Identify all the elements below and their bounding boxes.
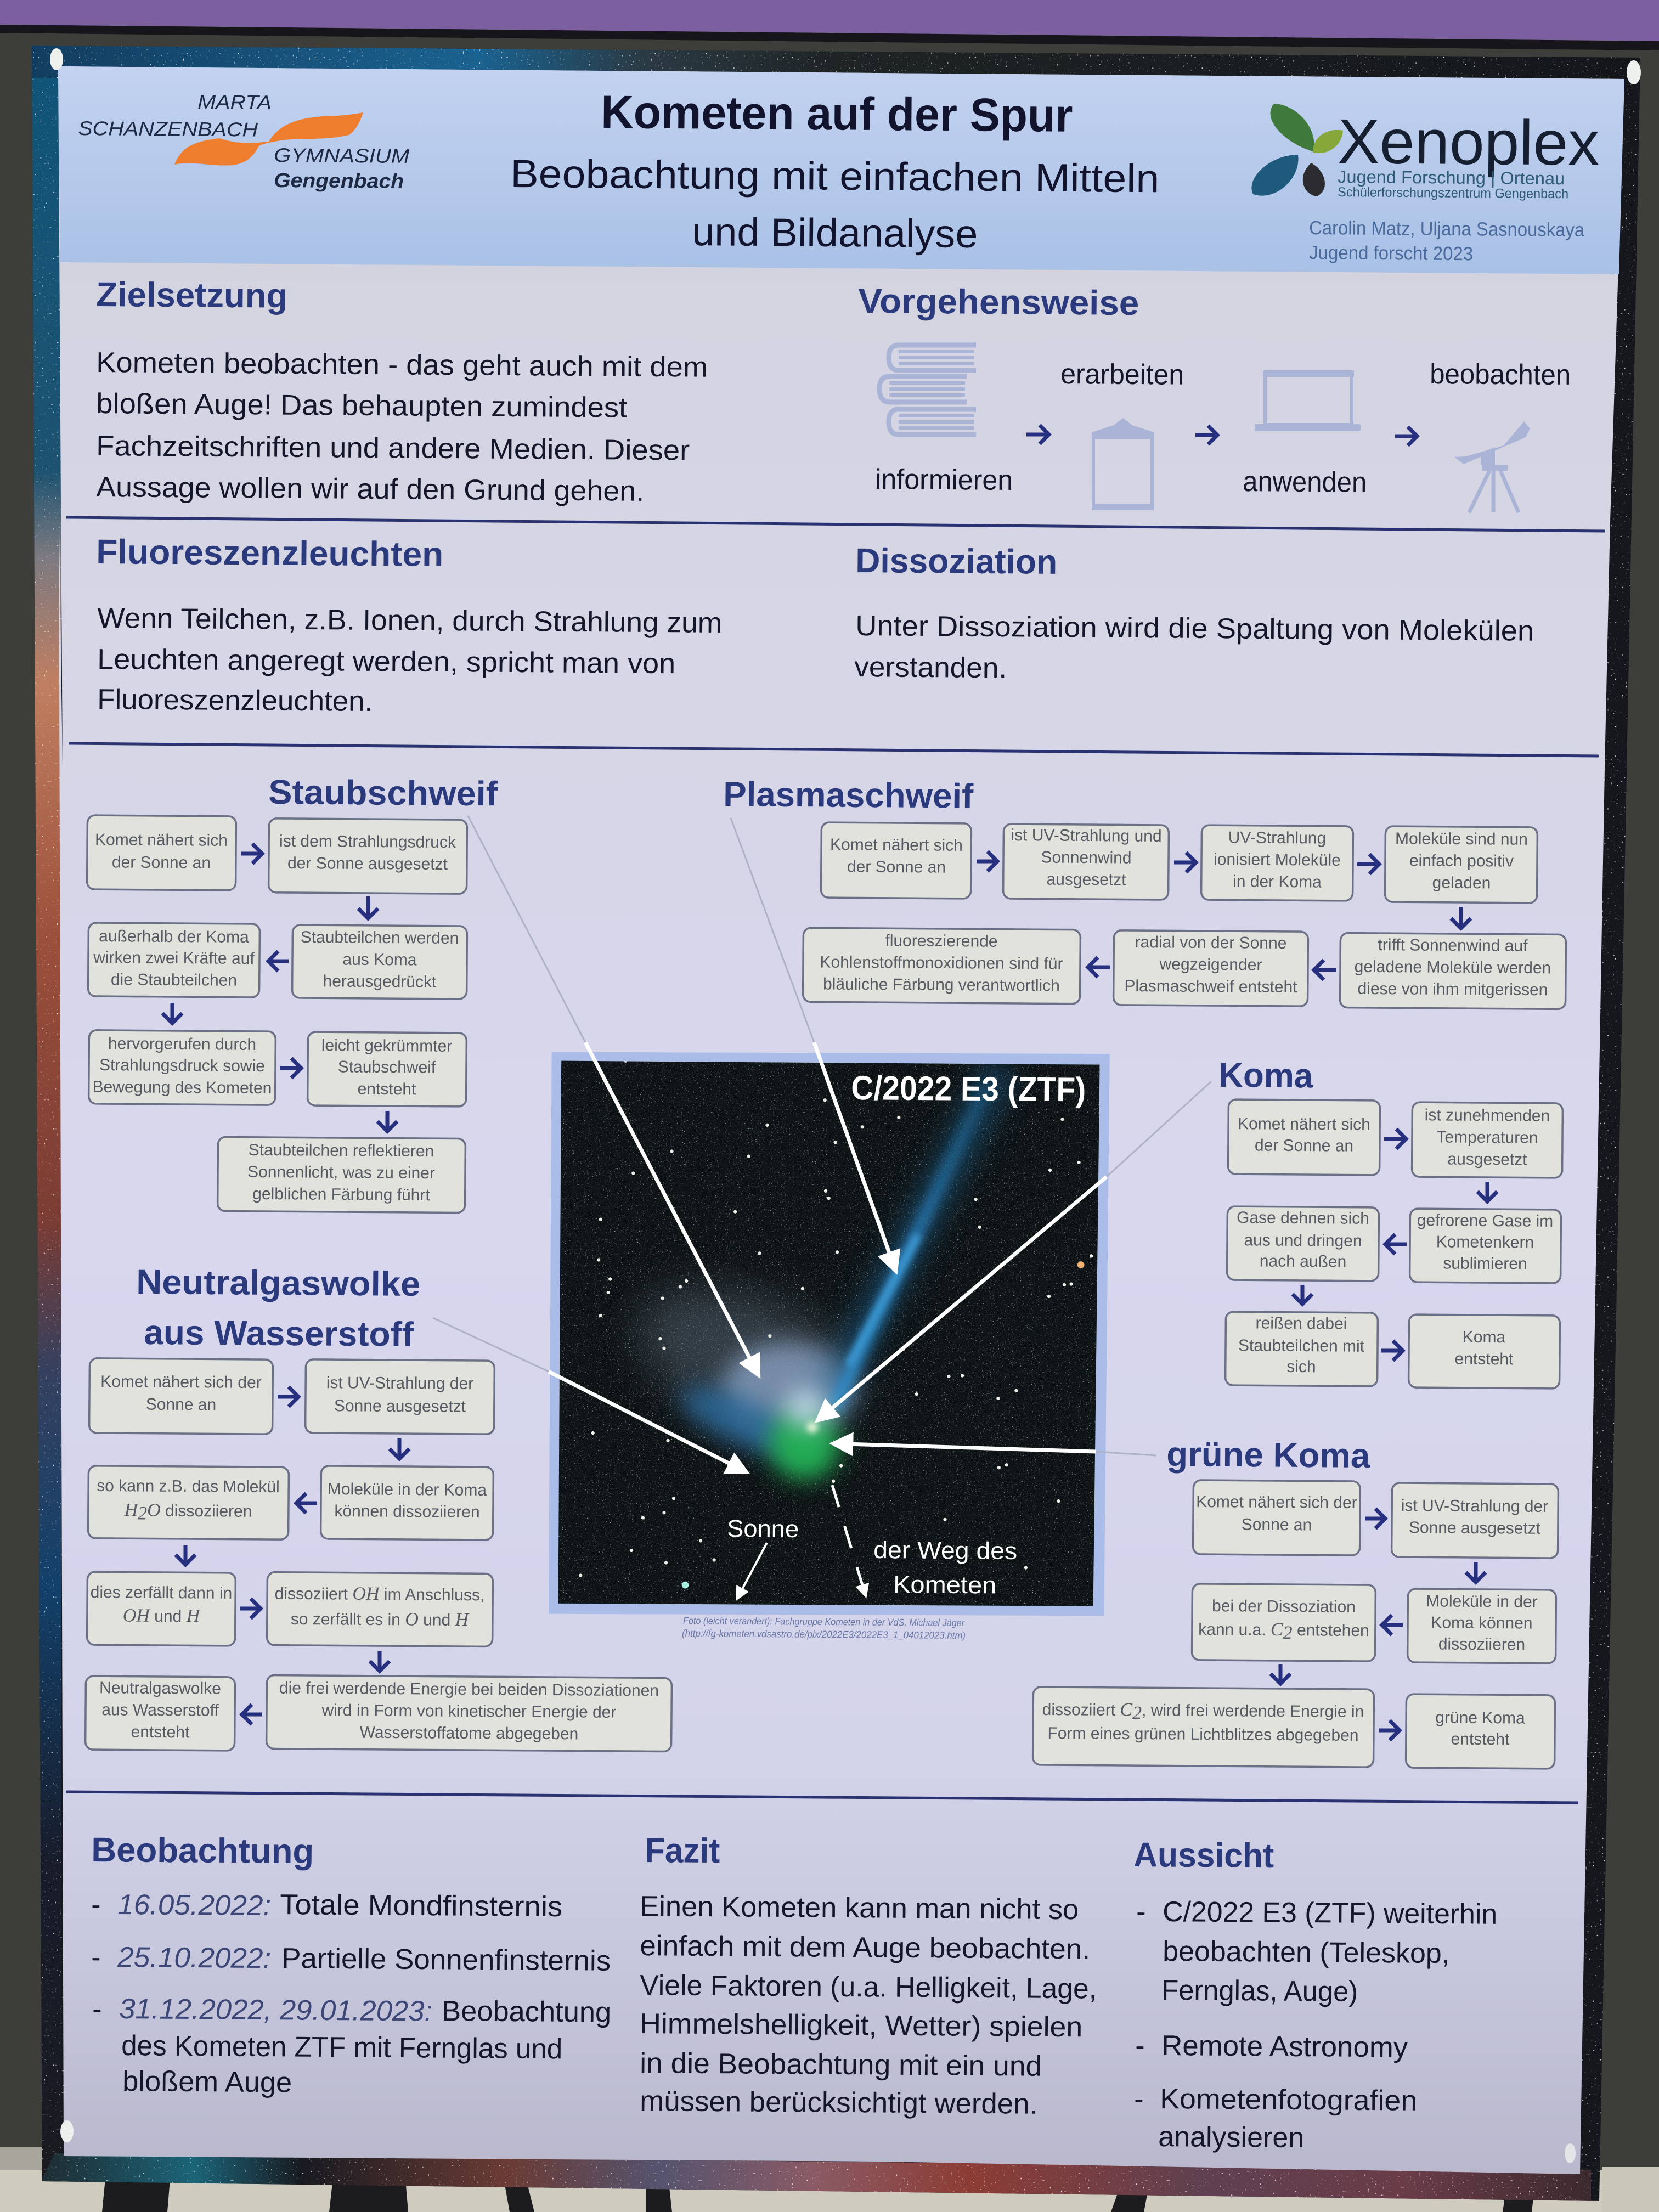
icon: telescope xyxy=(1454,421,1530,512)
icon: four leaves xyxy=(1251,104,1343,196)
list item: 25.10.2022: - xyxy=(91,1942,101,1973)
text block: Zielsetzung: Fachzeitschriften und andere Medien. Dieser xyxy=(96,430,690,466)
box 7: bläuliche Färbung verantwortlich xyxy=(823,975,1060,995)
panel: grüne Koma flow xyxy=(1033,1435,1558,1769)
arrow xyxy=(268,951,289,971)
panel: Dissoziation xyxy=(854,541,1534,684)
box 2: ist UV-Strahlung und xyxy=(1011,826,1162,845)
list item: Remote Astronomy: Remote Astronomy xyxy=(1161,2030,1408,2064)
list item: 31.12.2022, 29.01.2023 xyxy=(92,1993,611,2098)
label: Sonne: Sonne xyxy=(727,1515,799,1543)
box 4 xyxy=(88,1466,289,1539)
text block: Fluoreszenzleuchten xyxy=(97,602,722,718)
label: erarbeiten: erarbeiten xyxy=(1060,358,1184,391)
arrow xyxy=(1357,854,1379,874)
box 3 xyxy=(1408,1589,1556,1663)
list item: Remote Astronomy: - xyxy=(1135,2030,1145,2062)
text block: Fluoreszenzleuchten: Leuchten angeregt werden, spricht man von xyxy=(97,644,675,680)
box 1 xyxy=(821,822,971,899)
box 6 xyxy=(1114,930,1308,1006)
arrow xyxy=(370,1651,390,1671)
list item: weiter beobachten: Fernglas, Auge) xyxy=(1161,1974,1358,2008)
list item: 16.05.2022: - xyxy=(91,1889,101,1921)
school logo: MARTA xyxy=(198,91,272,114)
box 2: Sonne ausgesetzt xyxy=(334,1397,466,1416)
box 1 xyxy=(87,815,236,890)
comet photo with frame xyxy=(549,1052,1110,1616)
box 6 xyxy=(308,1032,466,1107)
photo caption: Foto (leicht verändert): Fachgruppe Kometen in der VdS, Michael Jäger xyxy=(683,1615,965,1628)
heading: Neutralgaswolke aus Wasserstoff xyxy=(136,1263,421,1354)
box 4: 2 xyxy=(1283,1623,1293,1643)
arrow: Neutralgaswolke to photo xyxy=(433,1318,735,1466)
box 7 xyxy=(267,1675,672,1752)
box 3: Moleküle in der Koma xyxy=(328,1480,487,1499)
arrow xyxy=(377,1111,397,1131)
box 4: bei der Dissoziation xyxy=(1212,1597,1356,1616)
box 3 xyxy=(292,925,467,999)
panel: Fluoreszenzleuchten xyxy=(96,533,722,718)
list item: 16.05.2022: Totale Mondfinsternis xyxy=(280,1889,562,1923)
text block: Fazit: einfach mit dem Auge beobachten. xyxy=(640,1930,1090,1965)
box 5: reißen dabei xyxy=(1255,1314,1347,1333)
list item: Kometenfotografien: analysieren xyxy=(1158,2121,1304,2154)
label: beobachten: beobachten xyxy=(1430,358,1571,391)
box 2: ist UV-Strahlung der xyxy=(1401,1497,1548,1516)
arrow: Koma to photo xyxy=(827,1081,1211,1412)
text block: Fazit: müssen berücksichtigt werden. xyxy=(640,2085,1037,2120)
list item: weiter beobachten: - xyxy=(1136,1896,1146,1928)
panel: Staubschweif flow xyxy=(87,773,499,1213)
arrow xyxy=(241,844,262,864)
box 2: ausgesetzt xyxy=(1046,870,1126,889)
box 4: 2 xyxy=(138,1503,147,1523)
box 2 xyxy=(1003,824,1169,900)
box 6: grüne Koma xyxy=(1435,1708,1525,1728)
subtitle line 1: Beobachtung mit einfachen Mitteln xyxy=(510,152,1160,201)
box 6: entsteht xyxy=(358,1080,416,1098)
box 3: können dissoziieren xyxy=(334,1502,480,1521)
panel: Beobachtung xyxy=(91,1831,611,2098)
heading: Vorgehensweise: Vorgehensweise xyxy=(858,282,1139,323)
text block: Zielsetzung: Aussage wollen wir auf den Grund gehen. xyxy=(96,471,644,507)
icon: clipboard xyxy=(1092,418,1154,510)
box 5: dissoziiert C xyxy=(1042,1700,1132,1720)
box 8 xyxy=(86,1676,235,1751)
list item: weiter beobachten: beobachten (Teleskop, xyxy=(1163,1936,1449,1970)
box 4: Gase dehnen sich xyxy=(1237,1209,1369,1228)
photo caption xyxy=(682,1615,966,1641)
box 3: sublimieren xyxy=(1443,1254,1527,1273)
arrow xyxy=(1382,1615,1403,1635)
subtitle line 2: und Bildanalyse xyxy=(692,210,978,256)
text block: Fluoreszenzleuchten: Wenn Teilchen, z.B. Ionen, durch Strahlung zum xyxy=(97,602,722,639)
list item: 16.05.2022: 16.05.2022: xyxy=(117,1889,271,1922)
text block: Fazit xyxy=(640,1891,1097,2120)
box 3: herausgedrückt xyxy=(323,972,437,991)
box 7: gelblichen Färbung führt xyxy=(252,1185,431,1204)
box 3 xyxy=(1410,1209,1561,1283)
heading: Fazit: Fazit xyxy=(645,1831,720,1870)
box 2: der Sonne ausgesetzt xyxy=(287,854,448,873)
box 5 xyxy=(1226,1312,1378,1386)
box 6 xyxy=(1409,1314,1560,1389)
heading: Staubschweif: Staubschweif xyxy=(268,773,499,813)
box 5: sich xyxy=(1286,1358,1316,1376)
arrow xyxy=(1314,960,1336,980)
box 3: ionisiert Moleküle xyxy=(1214,850,1341,870)
box 4: geladen xyxy=(1432,874,1491,892)
box 4: Moleküle sind nun xyxy=(1395,830,1528,849)
text block: Fazit: Viele Faktoren (u.a. Helligkeit, Lage, xyxy=(640,1970,1097,2005)
box 5: geladene Moleküle werden xyxy=(1355,958,1551,977)
box 7: wird in Form von kinetischer Energie der xyxy=(321,1701,617,1722)
box 2 xyxy=(1412,1102,1562,1178)
panel: Aussicht xyxy=(1133,1836,1497,2154)
list item: 31.12.2022, 29.01.2023: - xyxy=(92,1993,102,2025)
text block: Dissoziation xyxy=(854,610,1534,684)
text block: Fazit: Himmelshelligkeit, Wetter) spielen xyxy=(640,2008,1082,2043)
box 7: die frei werdende Energie bei beiden Dissoziationen xyxy=(279,1679,659,1700)
box 6: entsteht xyxy=(1455,1350,1514,1368)
box 2: Temperaturen xyxy=(1436,1128,1538,1147)
box 4: außerhalb der Koma xyxy=(99,927,249,946)
box 4 xyxy=(88,923,259,997)
school logo: GYMNASIUM xyxy=(274,144,409,167)
arrow xyxy=(1365,1509,1385,1528)
box 3: Kometenkern xyxy=(1436,1233,1534,1252)
arrow xyxy=(176,1545,195,1565)
text block: Zielsetzung xyxy=(96,347,708,507)
arrow xyxy=(1381,1341,1403,1361)
text block: Zielsetzung: Kometen beobachten - das geht auch mit dem xyxy=(96,347,708,383)
heading: Zielsetzung: Zielsetzung xyxy=(96,275,288,315)
box 1 xyxy=(1228,1099,1380,1175)
box 6: Staubschweif xyxy=(338,1058,436,1077)
box 7 xyxy=(218,1137,465,1213)
list item: 25.10.2022 xyxy=(91,1942,611,1977)
box 3 xyxy=(1201,825,1353,901)
arrow: Staubschweif to photo xyxy=(468,816,753,1364)
box 7: Staubteilchen reflektieren xyxy=(249,1141,434,1160)
box 5: hervorgerufen durch xyxy=(108,1035,256,1054)
box 5 xyxy=(1340,933,1566,1009)
box 4: kann u.a. C xyxy=(1198,1620,1283,1640)
box 4: aus und dringen xyxy=(1244,1231,1362,1250)
box 3: Moleküle in der xyxy=(1426,1592,1538,1611)
arrow: grüne Koma to photo xyxy=(846,1444,1156,1455)
box 3 xyxy=(321,1466,493,1540)
arrow xyxy=(390,1438,409,1459)
arrow xyxy=(162,1003,182,1023)
panel: Neutralgaswolke flow xyxy=(86,1263,672,1752)
box 1: der Sonne an xyxy=(1255,1136,1353,1155)
box 2: ausgesetzt xyxy=(1447,1150,1527,1169)
box 8: entsteht xyxy=(131,1723,190,1741)
heading: Dissoziation: Dissoziation xyxy=(855,541,1058,582)
box 4: dissoziieren xyxy=(165,1502,252,1521)
panel: Plasmaschweif flow xyxy=(723,775,1566,1009)
box 4: O xyxy=(147,1500,161,1521)
Xenoplex logo: Xenoplex xyxy=(1338,106,1600,179)
box 3: in der Koma xyxy=(1233,872,1322,891)
box 5: , wird frei werdende Energie in xyxy=(1142,1701,1364,1721)
box 4: die Staubteilchen xyxy=(111,970,237,990)
box 7: Kohlenstoffmonoxidionen sind für xyxy=(820,953,1063,973)
box 6: so zerfällt es in O und H xyxy=(291,1609,470,1630)
box 5 xyxy=(89,1030,275,1105)
box 6: entsteht xyxy=(1451,1730,1510,1748)
label: C/2022 E3 (ZTF): C/2022 E3 (ZTF) xyxy=(851,1069,1086,1109)
list item: Kometenfotografien: Kometenfotografien xyxy=(1160,2083,1417,2117)
authors: Carolin Matz, Uljana Sasnouskaya xyxy=(1309,217,1585,241)
list item: Kometenfotografien: - xyxy=(1134,2083,1144,2115)
box 5: OH und H xyxy=(123,1606,201,1626)
authors xyxy=(1309,217,1585,264)
box 1 xyxy=(1193,1480,1360,1555)
panel: Zielsetzung xyxy=(96,275,708,507)
arrow xyxy=(1385,1234,1407,1254)
icon: orange swoosh xyxy=(174,112,363,166)
arrow xyxy=(1174,853,1196,872)
box 4 xyxy=(1385,826,1537,903)
box 8: aus Wasserstoff xyxy=(101,1701,219,1720)
Xenoplex logo xyxy=(1251,104,1600,201)
box 5: trifft Sonnenwind auf xyxy=(1378,936,1528,955)
box 6: wegzeigender xyxy=(1159,955,1262,974)
arrow xyxy=(1379,1720,1400,1740)
box 2 xyxy=(1392,1483,1558,1558)
text block: Fazit: Einen Kometen kann man nicht so xyxy=(640,1891,1079,1926)
box 1 xyxy=(89,1358,273,1434)
box 4: einfach positiv xyxy=(1409,851,1514,871)
arrow xyxy=(242,1705,262,1724)
box 6: Koma xyxy=(1463,1328,1506,1346)
box 1: Komet nähert sich xyxy=(830,836,963,855)
school logo: SCHANZENBACH xyxy=(78,117,258,141)
box 8: Neutralgaswolke xyxy=(99,1679,221,1698)
list item: 31.12.2022, 29.01.2023: 31.12.2022, 29.01.2023: xyxy=(119,1993,432,2027)
box 6: Plasmaschweif entsteht xyxy=(1124,977,1297,996)
icon: laptop xyxy=(1255,370,1361,431)
arrow xyxy=(1451,907,1471,928)
divider xyxy=(66,517,1605,531)
divider xyxy=(69,743,1599,756)
arrow xyxy=(1384,1129,1406,1149)
arrow: Plasmaschweif to photo xyxy=(731,818,891,1259)
box 1: Komet nähert sich xyxy=(95,831,228,850)
text block: Fluoreszenzleuchten: Fluoreszenzleuchten. xyxy=(97,684,373,718)
box 7 xyxy=(803,928,1080,1004)
list item: 31.12.2022, 29.01.2023: des Kometen ZTF mit Fernglas und xyxy=(121,2030,562,2065)
arrow xyxy=(1293,1285,1312,1304)
Xenoplex logo: Jugend Forschung | Ortenau xyxy=(1338,167,1565,188)
school logo xyxy=(78,91,409,193)
list item: 25.10.2022: 25.10.2022: xyxy=(117,1942,271,1974)
arrow: towards the sun xyxy=(741,1543,767,1592)
box 2: Sonnenwind xyxy=(1041,848,1132,867)
arrow xyxy=(1477,1182,1497,1201)
panel: Fazit xyxy=(640,1831,1097,2120)
box 7: Sonnenlicht, was zu einer xyxy=(247,1163,435,1182)
list item: weiter beobachten: C/2022 E3 (ZTF) weiterhin xyxy=(1163,1896,1497,1931)
header band xyxy=(58,66,1624,274)
heading: Neutralgaswolke aus Wasserstoff: Neutralgaswolke xyxy=(136,1263,421,1304)
box 6: radial von der Sonne xyxy=(1135,933,1287,952)
label: informieren: informieren xyxy=(875,464,1013,496)
list item: 31.12.2022, 29.01.2023: bloßem Auge xyxy=(122,2066,292,2098)
panel: Koma flow xyxy=(1218,1056,1562,1389)
heading: Aussicht: Aussicht xyxy=(1133,1836,1274,1875)
arrow xyxy=(977,851,997,871)
list item: 16.05.2022 xyxy=(91,1889,562,1923)
icon: stack of books xyxy=(879,345,976,435)
text block: Dissoziation: Unter Dissoziation wird die Spaltung von Molekülen xyxy=(855,610,1534,647)
heading: grüne Koma: grüne Koma xyxy=(1166,1435,1371,1475)
heading: Koma: Koma xyxy=(1218,1056,1313,1095)
box 2: ist dem Strahlungsdruck xyxy=(279,832,456,851)
box 5: Strahlungsdruck sowie xyxy=(99,1056,265,1075)
arrow xyxy=(278,1387,298,1407)
box 5: Form eines grünen Lichtblitzes abgegeben xyxy=(1047,1724,1359,1745)
box 1: der Sonne an xyxy=(112,853,211,872)
heading: Beobachtung: Beobachtung xyxy=(91,1831,314,1871)
box 3: aus Koma xyxy=(342,951,417,969)
box 7: Wasserstoffatome abgegeben xyxy=(360,1724,578,1743)
label: der Weg des Kometen xyxy=(873,1537,1017,1599)
box 5: dies zerfällt dann in xyxy=(91,1583,232,1602)
box 2: ist zunehmenden xyxy=(1425,1106,1550,1125)
box 6: dissoziiert OH im Anschluss, xyxy=(275,1583,484,1605)
box 4: so kann z.B. das Molekül xyxy=(97,1477,280,1496)
box 2 xyxy=(306,1359,494,1434)
authors: Jugend forscht 2023 xyxy=(1309,242,1473,264)
list item: weiter beobachten xyxy=(1136,1896,1497,2008)
heading: Plasmaschweif: Plasmaschweif xyxy=(723,775,974,816)
box 5: 2 xyxy=(1132,1703,1142,1723)
box 1: Komet nähert sich der xyxy=(100,1373,262,1392)
arrow xyxy=(358,896,378,918)
box 6: leicht gekrümmter xyxy=(321,1036,452,1056)
Xenoplex logo: Schülerforschungszentrum Gengenbach xyxy=(1338,185,1568,201)
box 2 xyxy=(269,819,467,894)
box 2: ist UV-Strahlung der xyxy=(326,1374,473,1393)
box 1: Sonne an xyxy=(146,1396,216,1414)
arrow xyxy=(280,1058,301,1078)
school logo: Gengenbach xyxy=(274,169,404,193)
box 7: fluoreszierende xyxy=(885,932,998,951)
box 5: Staubteilchen mit xyxy=(1238,1336,1365,1356)
arrow: dashed comet path xyxy=(832,1485,864,1589)
box 4 xyxy=(1192,1584,1375,1661)
list item: 31.12.2022, 29.01.2023: Beobachtung xyxy=(442,1995,611,2028)
list item: 25.10.2022: Partielle Sonnenfinsternis xyxy=(281,1943,611,1977)
box 4 xyxy=(1227,1206,1379,1281)
arrow xyxy=(1466,1562,1486,1582)
box 5: Bewegung des Kometen xyxy=(92,1078,272,1097)
arrow xyxy=(240,1599,261,1618)
list item: Kometenfotografien xyxy=(1134,2083,1417,2154)
photo caption: (http://fg-kometen.vdsastro.de/pix/2022E3/2022E3_1_04012023.htm) xyxy=(682,1628,966,1641)
box 4: H xyxy=(123,1500,139,1520)
box 3: UV-Strahlung xyxy=(1228,828,1326,848)
box 4: entstehen xyxy=(1293,1621,1369,1640)
title: Kometen auf der Spur xyxy=(601,86,1073,142)
box 1: Sonne an xyxy=(1242,1516,1312,1534)
box 1: Komet nähert sich xyxy=(1238,1115,1370,1134)
label: der Weg des Kometen: der Weg des xyxy=(873,1537,1017,1565)
panel: Vorgehensweise xyxy=(858,282,1571,512)
box 3: Koma können xyxy=(1431,1613,1533,1633)
box 2: Sonne ausgesetzt xyxy=(1409,1519,1541,1538)
box 1: Komet nähert sich der xyxy=(1196,1493,1357,1512)
box 3: dissoziieren xyxy=(1438,1635,1525,1654)
box 6 xyxy=(1406,1694,1555,1769)
box 4: nach außen xyxy=(1260,1252,1346,1271)
arrow xyxy=(296,1493,317,1513)
label: der Weg des Kometen: Kometen xyxy=(893,1571,996,1599)
box 3: Staubteilchen werden xyxy=(301,928,459,947)
box 5: diese von ihm mitgerissen xyxy=(1357,980,1548,999)
box 5 xyxy=(87,1572,235,1646)
arrow xyxy=(1271,1664,1290,1684)
box 3: gefrorene Gase im xyxy=(1417,1211,1553,1231)
text block: Dissoziation: verstanden. xyxy=(854,651,1007,684)
box 1: der Sonne an xyxy=(847,857,946,877)
arrow xyxy=(1395,427,1417,445)
stars xyxy=(580,1061,1091,1576)
text block: Zielsetzung: bloßen Auge! Das behaupten zumindest xyxy=(96,388,628,424)
heading: Fluoreszenzleuchten: Fluoreszenzleuchten xyxy=(96,533,444,574)
label: anwenden: anwenden xyxy=(1243,466,1367,499)
heading: Neutralgaswolke aus Wasserstoff: aus Wasserstoff xyxy=(144,1313,415,1354)
box 6 xyxy=(267,1572,493,1646)
arrow xyxy=(1088,957,1110,977)
arrow xyxy=(1026,425,1049,444)
arrow xyxy=(1195,426,1217,444)
box 5 xyxy=(1033,1687,1374,1767)
box 4: wirken zwei Kräfte auf xyxy=(93,949,255,968)
text block: Fazit: in die Beobachtung mit ein und xyxy=(640,2047,1042,2083)
divider xyxy=(66,1792,1578,1803)
